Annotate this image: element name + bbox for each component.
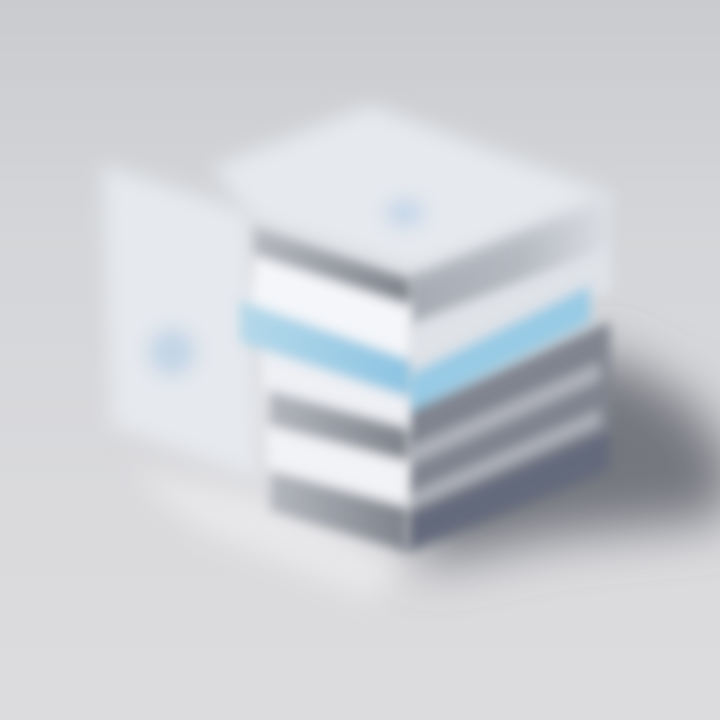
cube left face <box>240 224 410 552</box>
top dark band <box>255 224 410 306</box>
cast shadow <box>420 350 720 565</box>
card blue smudge <box>148 328 196 376</box>
middle grey band <box>268 390 408 462</box>
bottom dark band <box>270 470 408 552</box>
left blue band <box>240 300 410 398</box>
soft ground glow <box>130 470 400 600</box>
white layer three <box>268 428 408 505</box>
white layer two <box>262 352 408 428</box>
top blue mark <box>385 200 425 226</box>
cube top face <box>212 105 612 272</box>
right face blue band <box>408 285 590 412</box>
cube right face <box>408 190 612 552</box>
right face lower layers <box>408 322 610 552</box>
white layer one <box>250 258 410 362</box>
left card <box>102 165 260 480</box>
